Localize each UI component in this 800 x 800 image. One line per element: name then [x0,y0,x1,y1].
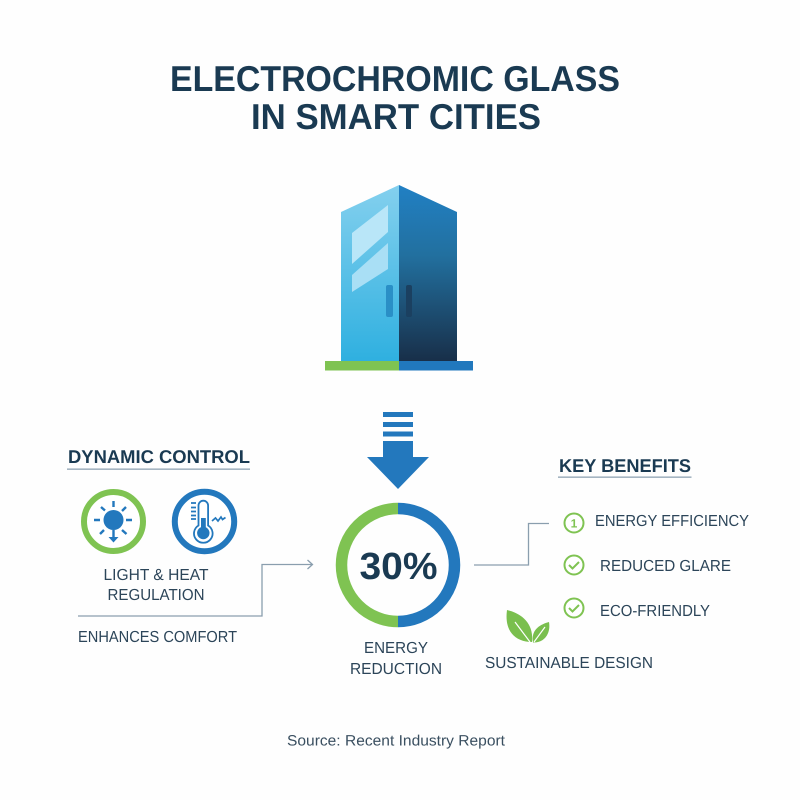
arrow: down to energy reduction [367,412,429,489]
heading: dynamic control: DYNAMIC CONTROL [68,446,250,467]
benefit: eco-friendly: ECO-FRIENDLY [600,603,710,620]
heading: key benefits: KEY BENEFITS [559,455,691,476]
title: ELECTROCHROMIC GLASS [170,58,620,99]
arrow: comfort connector [78,560,312,616]
benefit: reduced glare [564,556,731,575]
panel: key benefits [485,455,749,672]
title: IN SMART CITIES [251,96,541,137]
icon: sun with down arrow [84,492,143,551]
label: light and heat regulation: LIGHT & HEAT [104,567,209,584]
connector: ring to benefits [474,524,549,565]
benefit: energy efficiency [564,513,749,532]
icon: glass building [325,185,473,370]
benefit: eco-friendly [564,598,710,620]
label: enhances comfort: ENHANCES COMFORT [78,629,237,646]
chart: 30% energy reduction ring: 30% [360,546,438,588]
label: light and heat regulation [104,567,209,604]
source note: Source: Recent Industry Report [287,732,506,750]
icon: thermometer [175,492,234,551]
panel: dynamic control [67,446,312,646]
benefit: energy efficiency: 1 [571,516,578,530]
title [170,58,620,137]
label: sustainable design: SUSTAINABLE DESIGN [485,655,653,672]
label: energy reduction [350,640,442,678]
label: energy reduction: REDUCTION [350,661,442,678]
benefit: reduced glare: REDUCED GLARE [600,558,731,575]
chart: 30% energy reduction ring [342,508,454,622]
benefit: energy efficiency: ENERGY EFFICIENCY [595,513,749,530]
label: light and heat regulation: REGULATION [108,587,204,604]
icon: leaves [507,610,549,643]
label: energy reduction: ENERGY [364,640,428,657]
